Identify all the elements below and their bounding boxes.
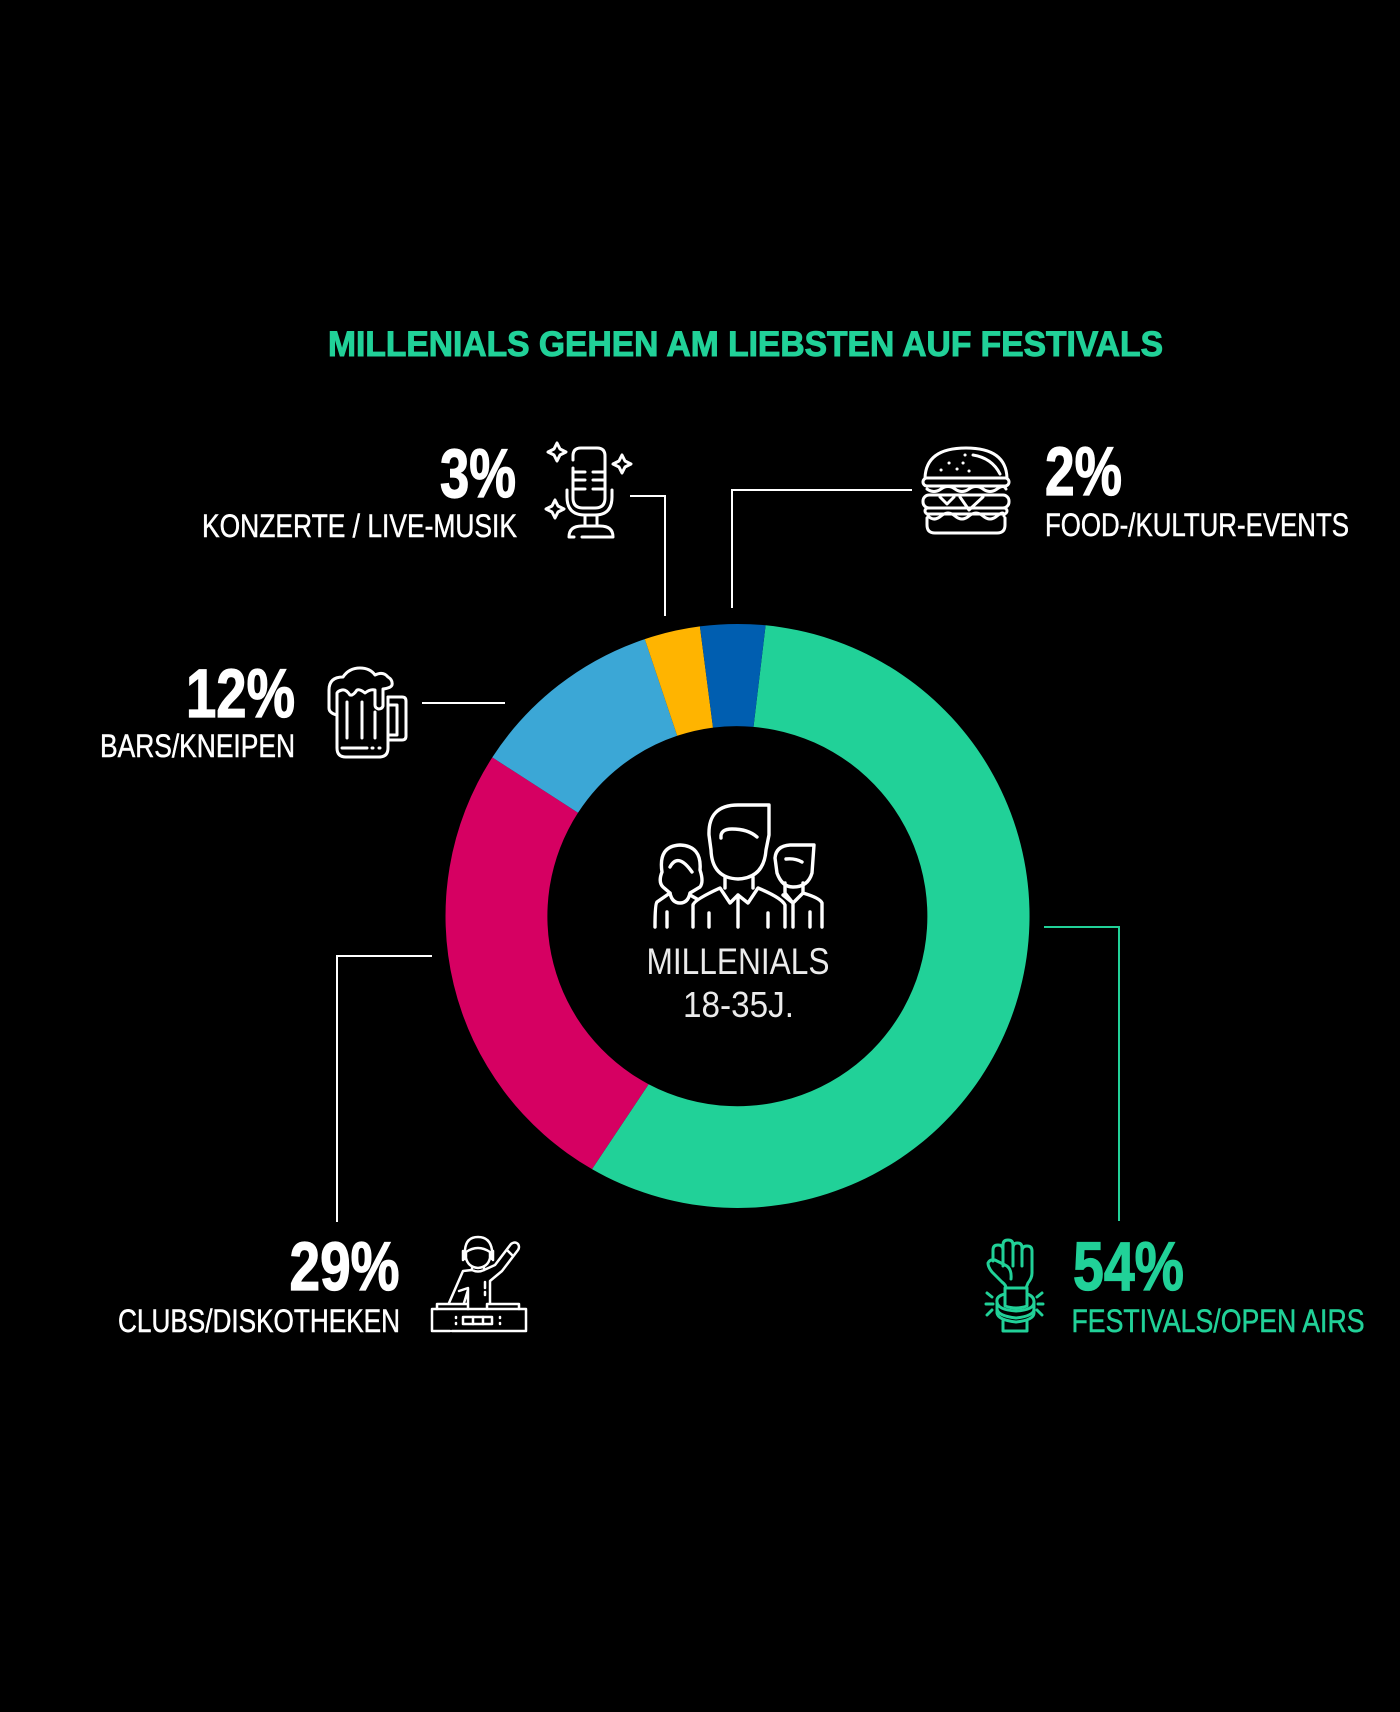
callout line: clubs: [337, 956, 432, 1222]
callout: festivals: [1072, 1228, 1364, 1339]
icon: dj: [432, 1237, 526, 1331]
segment: food 2%: [700, 624, 766, 728]
value: 54%: 54%: [1073, 1228, 1184, 1305]
segment: clubs 29%: [446, 757, 649, 1169]
donut chart: [446, 624, 1030, 1208]
value: 2%: 2%: [1045, 433, 1122, 510]
callout line: food: [732, 490, 912, 608]
label: konzerte: KONZERTE / LIVE-MUSIK: [202, 508, 517, 544]
icon: microphone: [546, 443, 631, 537]
icon: millenials group: [655, 805, 822, 927]
label: clubs: CLUBS/DISKOTHEKEN: [118, 1303, 400, 1339]
icon: burger: [923, 448, 1009, 533]
value: 3%: 3%: [440, 435, 516, 512]
callout line: festivals: [1044, 927, 1119, 1221]
callout: konzerte: [202, 435, 517, 544]
callout: clubs: [118, 1228, 400, 1339]
segment: festivals 54%: [592, 625, 1030, 1208]
center label: age: 18-35J.: [683, 984, 794, 1025]
value: 12%: 12%: [186, 655, 295, 732]
callout: food: [1045, 433, 1349, 543]
icon: beer mug: [329, 668, 406, 757]
center label: millenials: MILLENIALS: [646, 941, 830, 982]
segment: bars 12%: [492, 639, 677, 813]
icon: raised fist: [986, 1240, 1043, 1331]
value: 29%: 29%: [290, 1228, 400, 1305]
callout line: bars: [422, 702, 505, 704]
label: bars: BARS/KNEIPEN: [100, 728, 295, 764]
segment: konzerte 3%: [645, 626, 713, 736]
title: MILLENIALS GEHEN AM LIEBSTEN AUF FESTIVALS: [328, 325, 1163, 364]
callout line: konzerte: [630, 496, 665, 616]
callout: bars: [100, 655, 295, 764]
